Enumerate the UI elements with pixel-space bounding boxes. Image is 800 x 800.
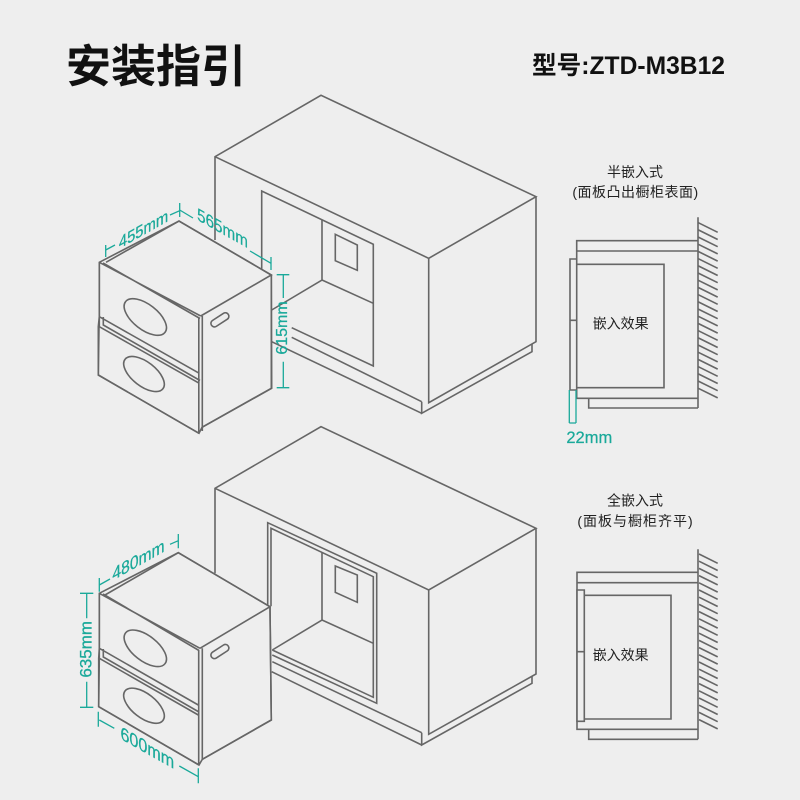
- 615mm label: 615mm: [274, 301, 291, 355]
- cabinet section: [577, 572, 698, 739]
- front panel: [577, 590, 584, 721]
- cabinet: fully embedded: [215, 427, 536, 745]
- wall with hatching: [698, 217, 718, 408]
- drawer unit: fully embedded: [99, 553, 271, 765]
- caption note: fully embedded: (面板与橱柜齐平): [577, 513, 694, 529]
- side section: semi-embedded: [566, 164, 718, 447]
- side section: fully embedded: [577, 492, 718, 739]
- 22mm label: 22mm: [566, 429, 612, 447]
- upper drawer oval: [118, 623, 173, 674]
- appliance body: [584, 595, 671, 719]
- 480mm label: 480mm: [112, 535, 165, 585]
- lower drawer oval: [118, 681, 170, 730]
- 22mm dimension: [569, 390, 576, 423]
- cabinet: semi-embedded: [215, 95, 536, 413]
- dimensions: semi-embedded drawer: [106, 203, 291, 388]
- upper drawer oval: [118, 292, 173, 342]
- caption: semi-embedded: 半嵌入式: [607, 164, 663, 180]
- icon: side handle: [210, 643, 230, 660]
- front panel: [570, 259, 577, 390]
- caption: fully embedded: 全嵌入式: [607, 492, 663, 508]
- cabinet section: [577, 241, 698, 408]
- label: embed effect: 嵌入效果: [593, 316, 649, 332]
- dimensions: fully embedded drawer: [76, 534, 198, 783]
- appliance body: [577, 264, 664, 388]
- lower drawer oval: [118, 350, 170, 398]
- title: 安装指引: [66, 41, 246, 92]
- 600mm label: 600mm: [120, 722, 174, 773]
- 455mm label: 455mm: [119, 206, 168, 253]
- wall with hatching: [698, 549, 718, 739]
- drawer unit: semi-embedded: [98, 221, 272, 433]
- 565mm label: 565mm: [197, 204, 248, 252]
- icon: side handle: [210, 311, 230, 328]
- label: embed effect: 嵌入效果: [593, 647, 649, 663]
- caption note: semi-embedded: (面板凸出橱柜表面): [572, 184, 699, 200]
- model number: 型号:ZTD-M3B12: [532, 52, 725, 80]
- 635mm label: 635mm: [76, 621, 96, 678]
